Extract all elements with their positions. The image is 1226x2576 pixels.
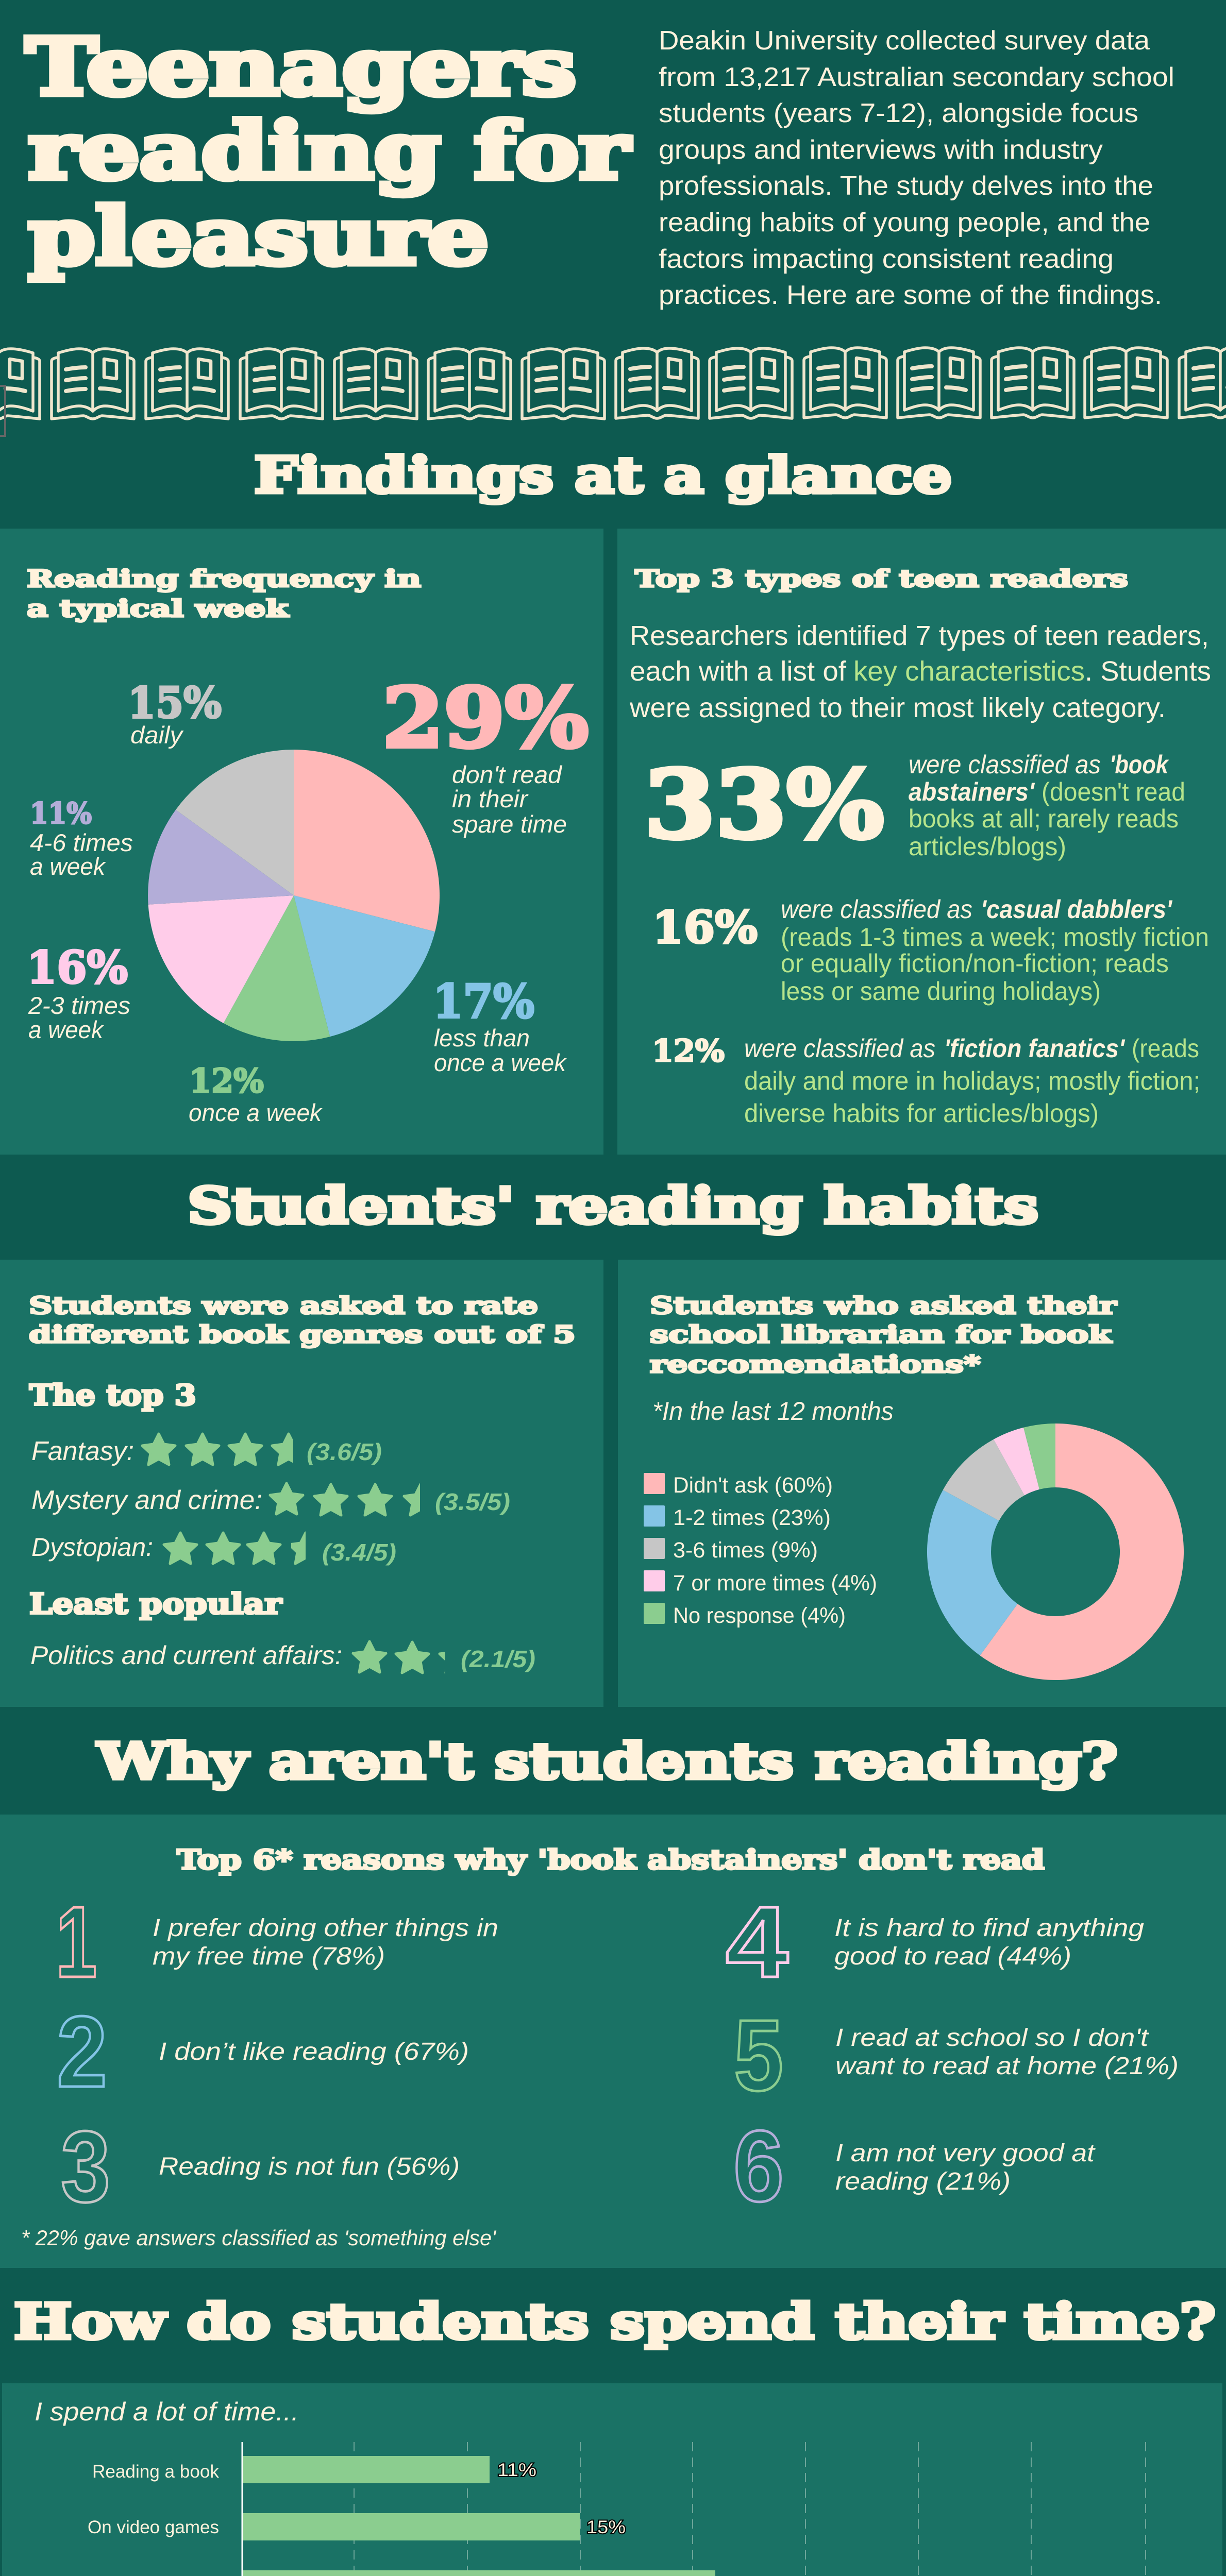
bar chart: On video games (88, 2517, 219, 2537)
panel heading: Top 3 types of teen readers (635, 565, 1128, 592)
intro text block (659, 26, 1174, 310)
intro text block: professionals. The study delves into the (659, 171, 1153, 201)
subheading: the top 3: The top 3 (29, 1378, 196, 1412)
stat: 33% book abstainers: books at all; rarely reads (909, 804, 1179, 833)
label: 11%: a week (30, 853, 106, 880)
label: 29% (382, 670, 589, 838)
title: Teenagers (26, 21, 576, 113)
panel heading: Students who asked their (650, 1292, 1117, 1319)
stat: 33% book abstainers: were classified as (909, 750, 1101, 779)
rating: mystery and crime: (3.5/5) (435, 1488, 510, 1515)
label: 11%: 11% (30, 796, 92, 831)
rating: fantasy: Fantasy: (31, 1436, 134, 1466)
panel heading: Reading frequency in (27, 565, 421, 592)
reason 6: reading (21%) (835, 2168, 1011, 2195)
reason 1: 1 (56, 1886, 97, 1998)
reason 3 (61, 2110, 460, 2223)
stat: 33% book abstainers: abstainers' (909, 777, 1035, 806)
legend: Didn't ask (60%) (673, 1473, 833, 1498)
icon: row of open books (0, 348, 1226, 419)
label: 17%: 17% (433, 974, 534, 1029)
label: 17%: less than (434, 1024, 530, 1052)
reason 4: good to read (44%) (834, 1943, 1071, 1970)
intro text block: groups and interviews with industry (659, 135, 1103, 165)
reason 5 (734, 1999, 1179, 2112)
panel heading: different book genres out of 5 (29, 1320, 576, 1348)
reason 5: 5 (734, 1999, 783, 2112)
intro text block: practices. Here are some of the findings. (659, 280, 1162, 310)
panel: reasons for not reading (0, 1815, 1226, 2268)
panel: reading frequency (0, 529, 603, 1155)
rating: fantasy: (3.6/5) (307, 1438, 382, 1465)
stat: 16% casual dabblers: (reads 1-3 times a week; mostly fiction (781, 923, 1209, 952)
reason 6: I am not very good at (835, 2140, 1096, 2167)
reason 2: 2 (57, 1995, 107, 2108)
label: 16% (27, 942, 130, 1043)
panel heading (650, 1292, 1117, 1378)
label: 12%: once a week (189, 1099, 323, 1126)
stat: 16% casual dabblers: were classified as (781, 895, 972, 924)
stat: 33% book abstainers: articles/blogs) (909, 832, 1066, 861)
reason 6 (733, 2110, 1096, 2223)
stat: 12% fiction fanatics: 'fiction fanatics' (944, 1034, 1126, 1063)
intro paragraph (629, 620, 1211, 723)
intro text block: reading habits of young people, and the (659, 208, 1150, 238)
reason 2: I don’t like reading (67%) (159, 2038, 469, 2065)
bar chart: 11% (497, 2460, 536, 2480)
label: 29%: 29% (382, 670, 589, 766)
stat: 12% fiction fanatics: (reads (1132, 1034, 1199, 1063)
heading: how do students spend their time: How do students spend their time? (14, 2293, 1216, 2350)
intro text block: from 13,217 Australian secondary school (659, 62, 1174, 92)
intro paragraph: Researchers identified 7 types of teen readers, (630, 620, 1209, 651)
label: 17% (433, 974, 567, 1076)
heading: why aren't students reading: Why aren't students reading? (97, 1732, 1118, 1790)
rating: mystery and crime (31, 1483, 510, 1515)
footnote: last 12 months: *In the last 12 months (652, 1397, 894, 1426)
panel heading: Students were asked to rate (29, 1292, 538, 1319)
label: 16%: 16% (27, 942, 128, 994)
label: 11% (30, 796, 133, 880)
intro paragraph: . Students (1085, 656, 1211, 687)
panel: time spent chart (2, 2383, 1222, 2576)
rating: politics and current affairs (30, 1641, 535, 1673)
reason 3: 3 (61, 2110, 110, 2223)
rating: mystery and crime: Mystery and crime: (31, 1485, 262, 1515)
reason 2 (57, 1995, 469, 2108)
label: 12%: 12% (189, 1062, 264, 1100)
reason 6: 6 (733, 2110, 784, 2223)
subheading: least popular: Least popular (29, 1587, 282, 1620)
legend: No response (4%) (673, 1603, 846, 1628)
bar chart: 15% (586, 2517, 626, 2537)
label: 29%: don't read (452, 761, 563, 788)
stat: 33% book abstainers: 33% (644, 750, 884, 859)
heading: findings at a glance: Findings at a glance (254, 446, 952, 504)
stat: 12% fiction fanatics: daily and more in holidays; mostly fiction; (744, 1066, 1200, 1095)
pie chart (148, 750, 440, 1041)
bar chart (50, 2442, 1146, 2576)
rating: dystopian: Dystopian: (31, 1533, 153, 1562)
label: 12% (189, 1062, 323, 1126)
panel: school librarian recommendations (618, 1260, 1226, 1707)
donut chart (927, 1423, 1184, 1680)
stat: 12% fiction fanatics (652, 1033, 1200, 1128)
panel heading: Top 6* reasons why 'book abstainers' don't read (177, 1844, 1045, 1876)
intro text block: Deakin University collected survey data (659, 26, 1150, 56)
stat: 16% casual dabblers: less or same during holidays) (781, 977, 1101, 1006)
label: 29%: spare time (452, 810, 567, 838)
legend: 1-2 times (23%) (673, 1505, 831, 1530)
label: 11%: 4-6 times (30, 829, 133, 856)
stat: 12% fiction fanatics: 12% (652, 1033, 725, 1069)
intro paragraph: key characteristics (853, 656, 1085, 687)
label: 16%: a week (28, 1016, 104, 1043)
stat: 33% book abstainers: 'book (1110, 750, 1169, 779)
reason 5: I read at school so I don't (835, 2024, 1149, 2052)
stat: 33% book abstainers: (doesn't read (1042, 777, 1185, 806)
bar chart: Reading a book (92, 2462, 219, 2482)
stat: 16% casual dabblers: 'casual dabblers' (981, 895, 1173, 924)
reason 1 (56, 1886, 498, 1998)
intro text block: students (years 7-12), alongside focus (659, 98, 1138, 128)
reason 3: Reading is not fun (56%) (159, 2153, 460, 2180)
heading: students' reading habits: Students' reading habits (188, 1177, 1038, 1235)
label: 15% (128, 679, 222, 749)
rating: dystopian: (3.4/5) (322, 1539, 396, 1566)
label: 17%: once a week (434, 1049, 567, 1076)
footnote: * 22% gave answers classified as 'something else' (21, 2226, 497, 2250)
panel heading (29, 1292, 576, 1348)
panel heading: a typical week (27, 595, 290, 622)
legend: 3-6 times (9%) (673, 1538, 818, 1563)
intro paragraph: each with a list of (630, 656, 847, 687)
panel heading: school librarian for book (650, 1320, 1113, 1348)
label: 15%: daily (130, 721, 184, 749)
reason 1: I prefer doing other things in (153, 1914, 498, 1942)
label: 15%: 15% (128, 679, 222, 728)
stat: 16% casual dabblers: 16% (652, 902, 758, 954)
stat: 16% casual dabblers (652, 895, 1209, 1006)
stat: 16% casual dabblers: or equally fiction/non-fiction; reads (781, 949, 1169, 978)
intro text block: factors impacting consistent reading (659, 244, 1114, 274)
rating: politics and current affairs: (2.1/5) (461, 1646, 535, 1672)
title (26, 21, 630, 282)
intro paragraph: were assigned to their most likely category. (629, 692, 1166, 723)
reason 4: It is hard to find anything (834, 1914, 1144, 1942)
label: 16%: 2-3 times (28, 992, 130, 1019)
chart title: I spend a lot of time... (35, 2397, 299, 2426)
title: reading for (28, 105, 630, 197)
legend (644, 1473, 877, 1628)
rating: politics and current affairs: Politics and current affairs: (30, 1641, 342, 1670)
label: 29%: in their (452, 785, 529, 812)
reason 4: 4 (726, 1886, 788, 1998)
reason 1: my free time (78%) (153, 1943, 385, 1970)
stat: 12% fiction fanatics: diverse habits for articles/blogs) (744, 1099, 1099, 1128)
stat: 12% fiction fanatics: were classified as (744, 1034, 935, 1063)
reason 5: want to read at home (21%) (835, 2053, 1179, 2080)
panel: book genre ratings (0, 1260, 603, 1707)
reason 4 (726, 1886, 1144, 1998)
panel: top 3 types of teen readers (617, 529, 1226, 1155)
rating: dystopian (31, 1533, 396, 1566)
panel heading: reccomendations* (650, 1350, 981, 1378)
rating: fantasy (31, 1434, 382, 1466)
title: pleasure (28, 190, 489, 282)
stat: 33% book abstainers (644, 750, 1185, 861)
panel heading (27, 565, 421, 622)
legend: 7 or more times (4%) (673, 1571, 877, 1596)
